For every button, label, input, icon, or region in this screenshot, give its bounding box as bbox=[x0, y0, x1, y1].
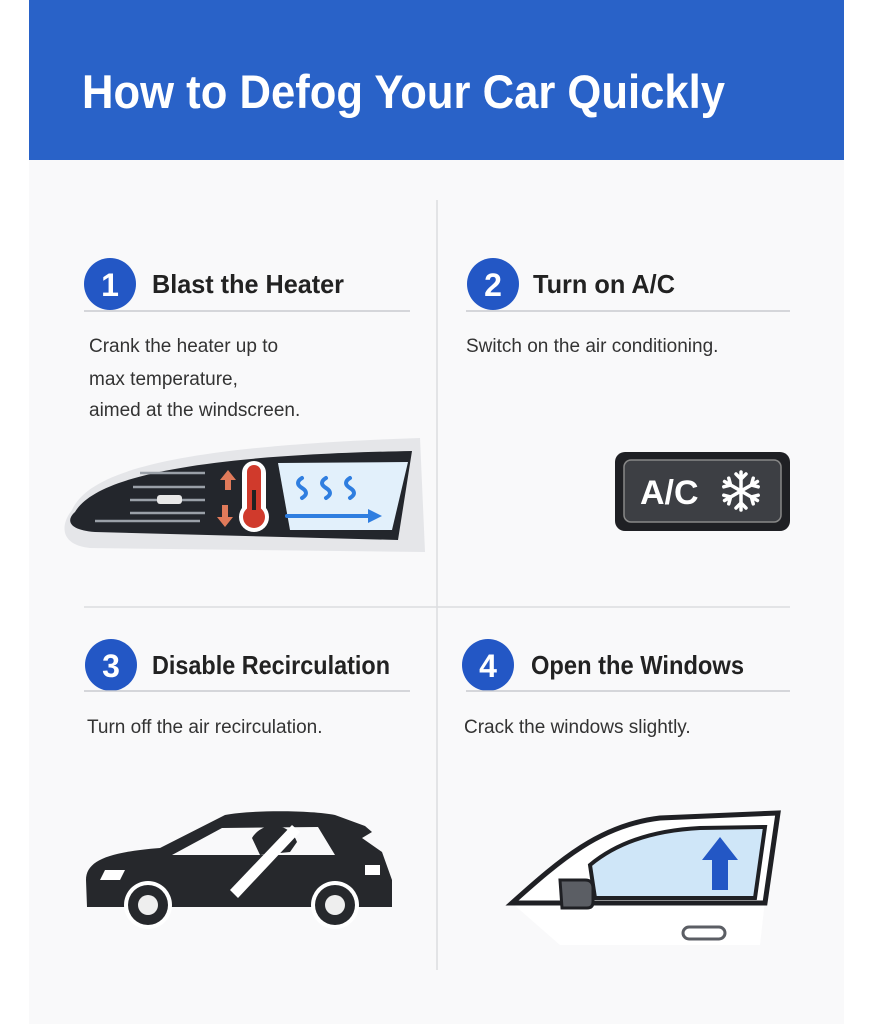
panel: step 1 bbox=[65, 258, 425, 552]
icon: A/C button: A/C bbox=[640, 474, 699, 512]
icon: car door window bbox=[512, 813, 778, 945]
step 1 text: max temperature, bbox=[89, 369, 238, 390]
step 4 badge: 4 bbox=[479, 648, 497, 684]
step 3 badge: 3 bbox=[102, 648, 120, 684]
step 4 badge bbox=[462, 639, 514, 691]
step 3 badge bbox=[85, 639, 137, 691]
step 1 text: aimed at the windscreen. bbox=[89, 400, 300, 421]
step 2 badge bbox=[467, 258, 519, 310]
icon: heater dashboard bbox=[65, 438, 425, 552]
step 2 badge: 2 bbox=[484, 267, 502, 303]
step 3 text: Turn off the air recirculation. bbox=[87, 717, 322, 738]
step 2 heading: Turn on A/C bbox=[533, 269, 675, 299]
panel: step 4 bbox=[462, 639, 790, 945]
step 1 badge: 1 bbox=[101, 267, 119, 303]
icon: A/C button bbox=[615, 452, 790, 531]
title: How to Defog Your Car Quickly bbox=[82, 65, 725, 118]
step 1 heading: Blast the Heater bbox=[152, 269, 344, 299]
step 1 text bbox=[89, 336, 300, 421]
step 2 text: Switch on the air conditioning. bbox=[466, 336, 718, 357]
header banner bbox=[29, 0, 844, 160]
step 4 text: Crack the windows slightly. bbox=[464, 717, 691, 738]
icon: car silhouette bbox=[86, 811, 392, 929]
step 3 heading: Disable Recirculation bbox=[152, 650, 390, 680]
step 1 text: Crank the heater up to bbox=[89, 336, 278, 357]
step 4 heading: Open the Windows bbox=[531, 650, 744, 680]
panel: step 3 bbox=[84, 639, 410, 929]
step 1 badge bbox=[84, 258, 136, 310]
panel: step 2 bbox=[466, 258, 790, 531]
